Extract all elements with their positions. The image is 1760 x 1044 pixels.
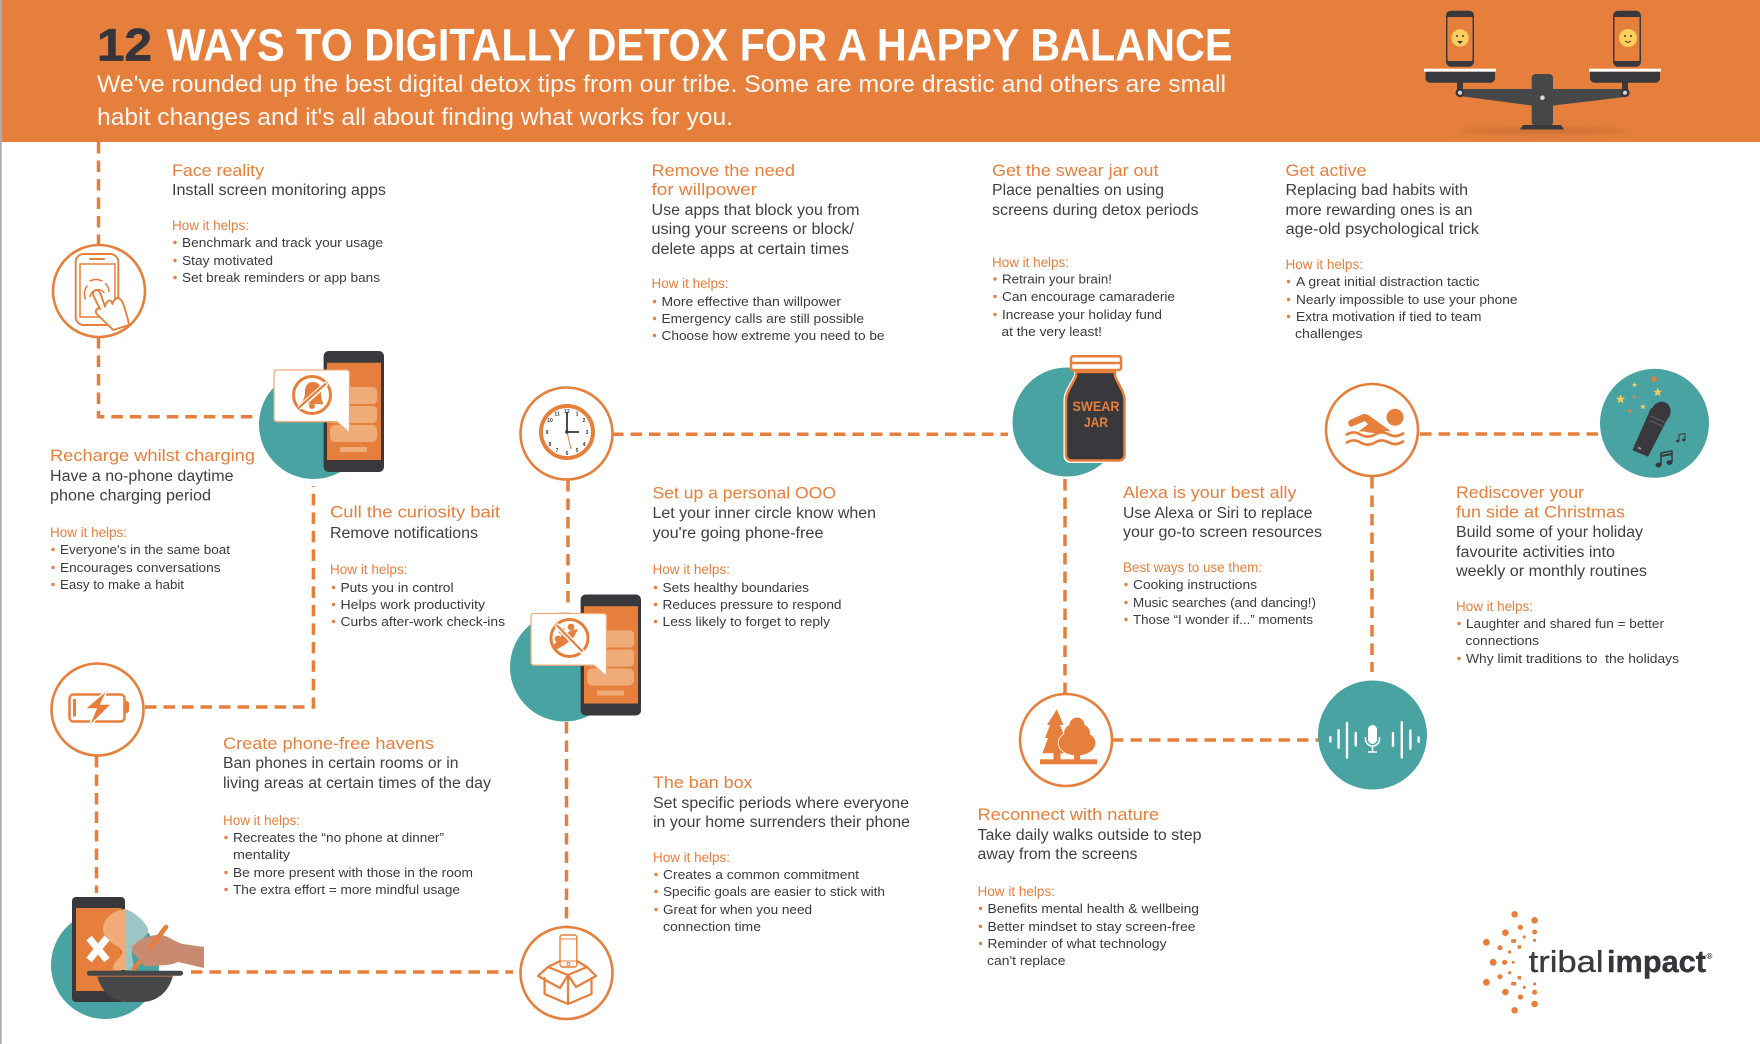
bullet list: Better mindset to stay screen-free: [988, 919, 1196, 934]
subtitle: [97, 71, 1226, 131]
bullet list: Emergency calls are still possible: [662, 311, 864, 326]
bullet list: Sets healthy boundaries: [662, 580, 810, 595]
how it helps label: How it helps:: [978, 884, 1055, 899]
bullet list: [993, 272, 1175, 339]
bullet list: [173, 235, 383, 285]
icon: clock in circle: 1: [576, 412, 579, 418]
description: Install screen monitoring apps: [172, 182, 386, 199]
description: Use apps that block you from: [652, 202, 860, 219]
description: [1286, 182, 1479, 238]
description: [653, 795, 910, 831]
description: you're going phone-free: [652, 525, 824, 542]
best ways label: Best ways to use them:: [1123, 560, 1262, 575]
bullet list: Recreates the “no phone at dinner”: [233, 830, 444, 845]
tip: The ban box: [653, 773, 910, 934]
bullet list: challenges: [1295, 326, 1363, 341]
heading: for willpower: [652, 180, 757, 199]
icon: karaoke microphone: [1600, 369, 1709, 478]
heading: The ban box: [653, 773, 753, 792]
bullet list: Be more present with those in the room: [233, 865, 473, 880]
bullet list: Can encourage camaraderie: [1002, 289, 1175, 304]
bullet list: [654, 580, 842, 629]
description: Ban phones in certain rooms or in: [223, 755, 458, 772]
bullet list: Benefits mental health & wellbeing: [988, 901, 1199, 916]
bullet list: Laughter and shared fun = better: [1466, 616, 1665, 631]
heading: Reconnect with nature: [978, 805, 1159, 824]
heading: Alexa is your best ally: [1123, 483, 1297, 502]
icon: clock in circle: 6: [566, 451, 569, 457]
bullet list: [1287, 274, 1518, 341]
icon: voice assistant waveform: [1318, 680, 1427, 790]
icon: clock in circle: 9: [546, 430, 549, 436]
description: your go-to screen resources: [1123, 524, 1322, 541]
heading: Recharge whilst charging: [50, 446, 255, 465]
bullet list: connection time: [663, 919, 761, 934]
subtitle: We've rounded up the best digital detox tips from our tribe. Some are more drastic and others are small: [97, 71, 1226, 98]
connector: ban box to notification phone: [565, 722, 568, 927]
icon: no-notifications phone with bubble: [259, 351, 384, 479]
bullet list: Reduces pressure to respond: [662, 597, 842, 612]
description: [1123, 505, 1322, 541]
bullet list: Stay motivated: [182, 253, 273, 268]
description: [652, 202, 860, 258]
logo: tribal impact: tribal: [1529, 944, 1604, 979]
heading: Cull the curiosity bait: [330, 502, 500, 522]
how it helps label: How it helps:: [992, 255, 1069, 270]
description: screens during detox periods: [992, 202, 1199, 219]
how it helps label: How it helps:: [652, 276, 728, 291]
bullet list: Increase your holiday fund: [1002, 307, 1162, 322]
bullet list: Easy to make a habit: [60, 577, 184, 592]
tip: Reconnect with nature: [978, 805, 1202, 968]
bullet list: Encourages conversations: [60, 560, 221, 575]
heading: Create phone-free havens: [223, 734, 434, 753]
icon: clock in circle: 11: [554, 412, 560, 418]
heading: [1456, 483, 1625, 522]
icon: clock in circle: 2: [583, 418, 586, 424]
logo: tribal impact: ®: [1706, 952, 1712, 961]
how it helps label: How it helps:: [652, 562, 730, 577]
description: in your home surrenders their phone: [653, 814, 910, 831]
bullet list: Reminder of what technology: [988, 936, 1167, 951]
icon: trees in circle: [1020, 694, 1112, 786]
bullet list: [332, 580, 506, 629]
description: more rewarding ones is an: [1286, 202, 1472, 219]
description: living areas at certain times of the day: [223, 775, 491, 792]
heading: Get the swear jar out: [992, 161, 1159, 180]
bullet list: Specific goals are easier to stick with: [663, 884, 885, 899]
heading: [652, 161, 795, 199]
description: favourite activities into: [1456, 544, 1615, 561]
logo: tribal impact: impact: [1607, 944, 1706, 979]
connector: charging to battery: [145, 486, 313, 707]
description: age-old psychological trick: [1286, 221, 1479, 238]
tip: Get the swear jar out: [992, 161, 1199, 339]
description: Let your inner circle know when: [652, 505, 876, 522]
description: weekly or monthly routines: [1455, 563, 1647, 580]
description: Have a no-phone daytime: [50, 468, 234, 485]
description: [652, 505, 876, 542]
bullet list: Helps work productivity: [340, 597, 486, 612]
connector: route between steps, left column: [98, 142, 256, 417]
icon: swimmer in circle: [1326, 384, 1418, 476]
bullet list: Retrain your brain!: [1002, 272, 1112, 286]
bullet list: [224, 830, 473, 897]
title: 12: [97, 20, 152, 70]
bullet list: More effective than willpower: [662, 294, 842, 309]
how it helps label: How it helps:: [50, 525, 127, 540]
bullet list: Set break reminders or app bans: [182, 270, 381, 285]
tip: Face reality: [172, 161, 386, 285]
heading: Rediscover your: [1456, 483, 1584, 502]
icon: swear jar: SWEAR: [1072, 398, 1120, 414]
connector: swear jar to nature: [1063, 479, 1067, 694]
description: phone charging period: [50, 488, 211, 504]
heading: Face reality: [172, 161, 265, 180]
icon: swear jar: [1012, 356, 1127, 476]
bullet list: Puts you in control: [340, 580, 454, 595]
tip: Remove the need for willpower: [652, 161, 884, 343]
description: delete apps at certain times: [652, 241, 849, 258]
bullet list: Benchmark and track your usage: [182, 235, 383, 250]
bullet list: mentality: [233, 847, 291, 862]
bullet list: Less likely to forget to reply: [662, 614, 831, 629]
description: Use Alexa or Siri to replace: [1123, 505, 1312, 522]
bullet list: Curbs after-work check-ins: [340, 614, 506, 629]
description: Remove notifications: [330, 525, 478, 542]
bullet list: Cooking instructions: [1133, 577, 1258, 592]
description: away from the screens: [978, 846, 1138, 863]
description: [992, 182, 1199, 219]
connector: voice assistant to swim: [1370, 477, 1374, 672]
icon: battery in circle: [52, 664, 144, 756]
description: [223, 755, 491, 792]
description: Build some of your holiday: [1456, 524, 1643, 541]
title: WAYS TO DIGITALLY DETOX FOR A HAPPY BALANCE: [166, 20, 1232, 70]
description: [1455, 524, 1647, 580]
how it helps label: How it helps:: [1286, 257, 1363, 272]
how it helps label: How it helps:: [330, 562, 408, 577]
icon: balance scale with phones: [1424, 11, 1661, 134]
subtitle: habit changes and it's all about finding what works for you.: [97, 104, 733, 131]
icon: clock in circle: 3: [586, 430, 589, 436]
connector: nature to voice assistant: [1112, 738, 1320, 742]
bullet list: [51, 542, 230, 592]
tip: Recharge whilst charging: [50, 446, 255, 592]
bullet list: [653, 294, 884, 343]
bullet list: A great initial distraction tactic: [1296, 274, 1480, 289]
bullet list: Creates a common commitment: [663, 867, 859, 882]
bullet list: [654, 867, 885, 934]
header banner: [2, 0, 1760, 142]
tip: Get active: [1286, 161, 1518, 341]
bullet list: Great for when you need: [663, 902, 812, 917]
bullet list: The extra effort = more mindful usage: [233, 882, 460, 897]
bullet list: [979, 901, 1199, 968]
icon: clock in circle: [520, 388, 612, 480]
connector: battery to dinner: [95, 756, 98, 893]
icon: clock in circle: 12: [564, 409, 570, 415]
tip: Set up a personal OOO: [652, 484, 876, 629]
bullet list: connections: [1466, 633, 1540, 648]
description: Place penalties on using: [992, 182, 1164, 199]
bullet list: [1124, 577, 1316, 627]
heading: Get active: [1286, 161, 1366, 180]
icon: dinner bowl, hand and phone: [51, 897, 204, 1019]
how it helps label: How it helps:: [1456, 599, 1533, 614]
bullet list: Nearly impossible to use your phone: [1296, 292, 1518, 307]
bullet list: Extra motivation if tied to team: [1296, 309, 1482, 324]
how it helps label: How it helps:: [653, 850, 730, 865]
bullet list: at the very least!: [1002, 324, 1102, 339]
tip: Create phone-free havens: [223, 734, 491, 897]
icon: clock in circle: 4: [583, 442, 586, 448]
logo: tribal impact: [1483, 911, 1712, 1014]
connector: dinner to ban box: [191, 970, 513, 974]
tip: Alexa is your best ally: [1123, 483, 1322, 627]
bullet list: can't replace: [987, 953, 1066, 968]
icon: clock in circle: 8: [549, 442, 552, 448]
connector: clock to swear jar: [612, 433, 1008, 436]
icon: clock in circle: 10: [547, 418, 553, 424]
bullet list: Why limit traditions to the holidays: [1466, 651, 1680, 666]
icon: clock in circle: 7: [556, 448, 559, 454]
heading: Set up a personal OOO: [652, 484, 836, 502]
bullet list: Choose how extreme you need to be: [662, 328, 884, 343]
tip: Rediscover your fun side at Christmas: [1455, 483, 1680, 666]
heading: fun side at Christmas: [1456, 502, 1625, 522]
icon: do-not-disturb phone with bubble: [510, 594, 641, 722]
heading: Remove the need: [652, 161, 795, 180]
how it helps label: How it helps:: [172, 218, 249, 233]
connector: notification phone to clock: [566, 480, 570, 605]
how it helps label: How it helps:: [223, 813, 300, 828]
bullet list: Music searches (and dancing!): [1133, 595, 1316, 610]
description: [978, 827, 1202, 863]
description: using your screens or block/: [652, 221, 855, 238]
bullet list: Everyone's in the same boat: [60, 542, 230, 557]
bullet list: [1457, 616, 1680, 666]
icon: swear jar: JAR: [1084, 414, 1108, 430]
description: [50, 468, 234, 504]
icon: phone touch in circle: [53, 245, 145, 337]
tip: Cull the curiosity bait: [330, 502, 506, 629]
connector: swim to microphone: [1420, 432, 1598, 436]
description: Take daily walks outside to step: [978, 827, 1202, 844]
description: Replacing bad habits with: [1286, 182, 1468, 199]
description: Set specific periods where everyone: [653, 795, 909, 812]
bullet list: Those “I wonder if...” moments: [1133, 612, 1314, 627]
icon: ban box in circle: [520, 927, 612, 1019]
icon: clock in circle: 5: [576, 448, 579, 454]
